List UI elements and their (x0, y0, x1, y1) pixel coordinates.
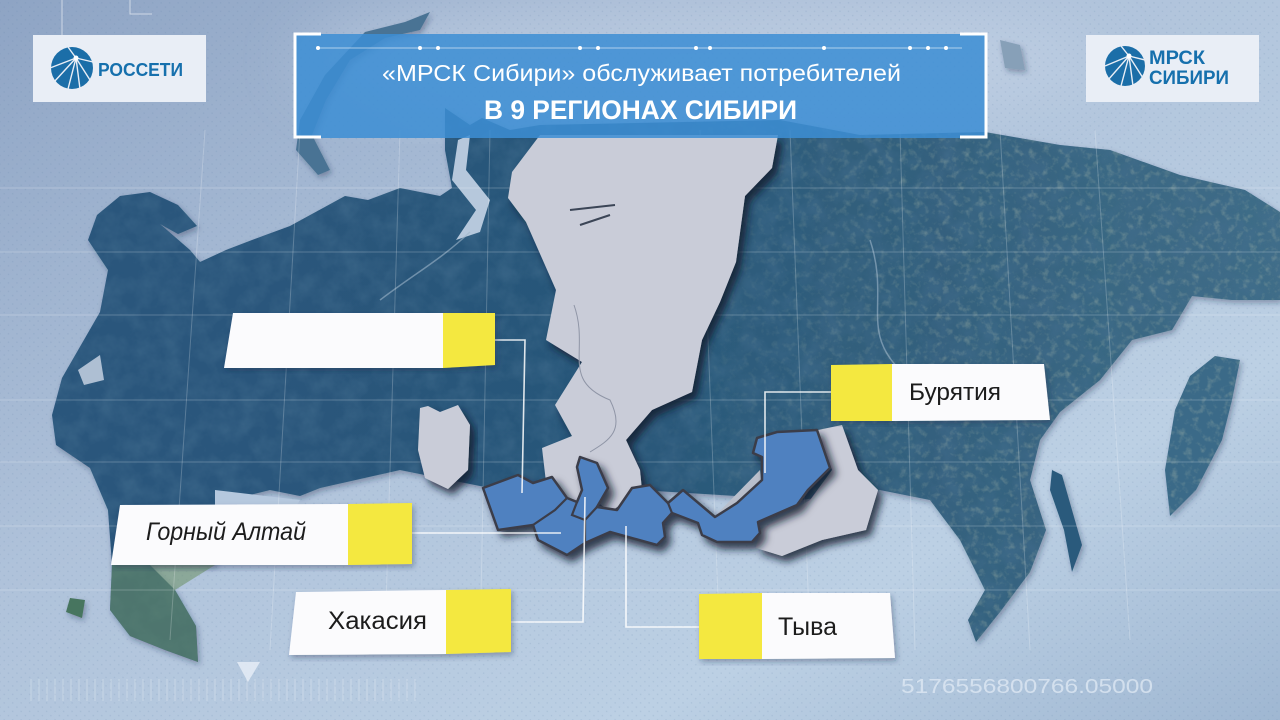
logo: MRSK Sibiri: МРСК (1149, 48, 1205, 69)
label: Buryatia (831, 364, 1050, 421)
Ob gulf and rivers (452, 135, 490, 240)
label: Tyva (699, 593, 895, 659)
label: Buryatia: Бурятия (909, 379, 1001, 406)
label: Gorny Altai (111, 503, 412, 565)
connector lines (412, 340, 831, 627)
decorative counter number: 5176556800766.05000 (901, 676, 1153, 698)
map: Krasnoyarsk krai (grey) (508, 135, 778, 512)
map: Zabaikalye (grey) (715, 425, 878, 556)
title line 2: В 9 РЕГИОНАХ СИБИРИ (484, 95, 797, 125)
logo: Rosseti: РОССЕТИ (98, 60, 183, 80)
icon: MRSK emblem (1105, 46, 1145, 86)
label: Gorny Altai: Горный Алтай (146, 518, 306, 546)
logo: MRSK Sibiri (1086, 35, 1259, 102)
timeline ticks (30, 679, 420, 701)
label: Khakasia: Хакасия (328, 607, 427, 635)
label: Khakasia (289, 589, 511, 655)
map: blue Siberian regions (483, 430, 830, 555)
logo: Rosseti (33, 35, 206, 102)
label: Tyva: Тыва (778, 613, 837, 641)
map: Omsk oblast (grey) (418, 405, 470, 489)
label: empty top-left (224, 313, 495, 368)
logo: MRSK Sibiri: СИБИРИ (1149, 68, 1229, 89)
title line 1: «МРСК Сибири» обслуживает потребителей (382, 60, 901, 86)
icon: timeline marker triangle (237, 662, 260, 682)
icon: Rosseti emblem (50, 47, 93, 89)
title banner (295, 34, 986, 138)
